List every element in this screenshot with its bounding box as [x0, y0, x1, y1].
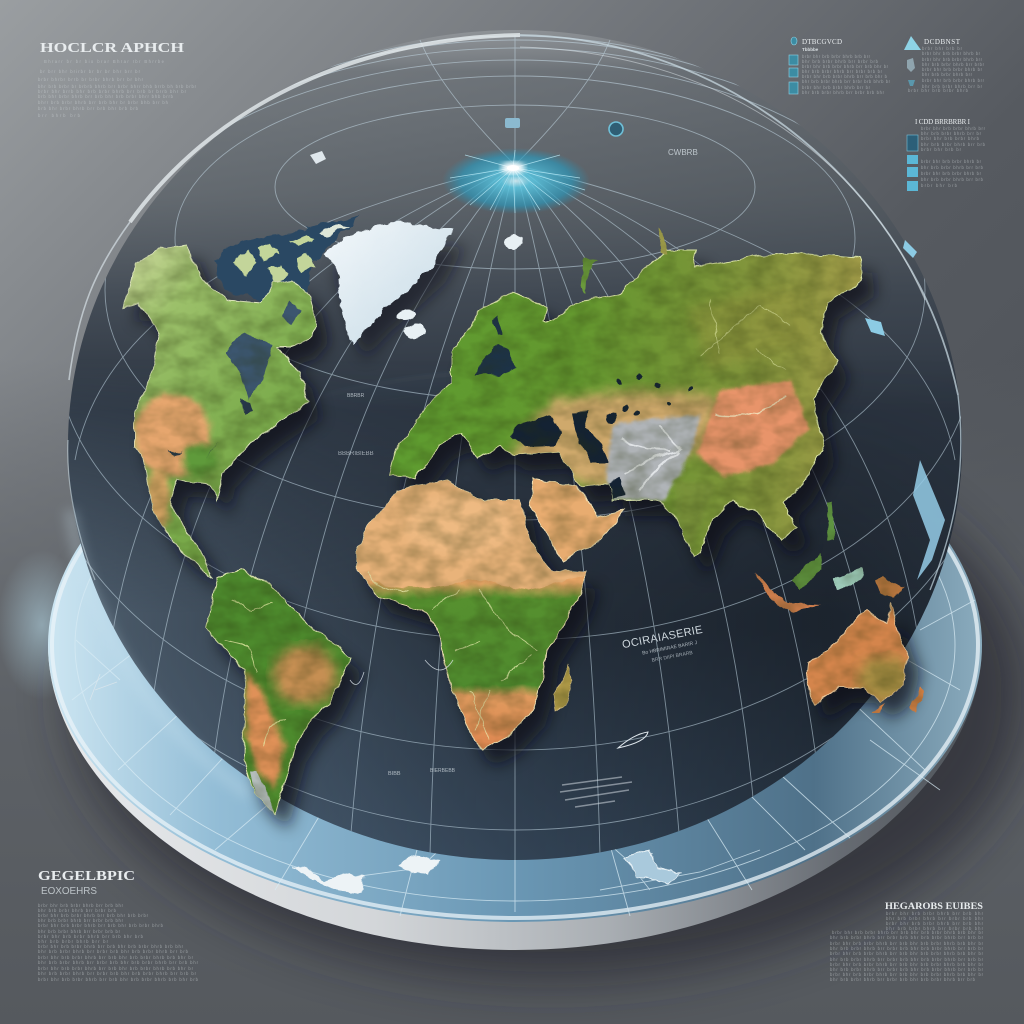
text: bhr brb brbr bhrb brr brb: [921, 142, 986, 147]
text: [908, 46, 985, 93]
text: bhr brb brbr bhrb brr br: [38, 939, 109, 944]
icon: small glyphs: [907, 58, 915, 86]
Eurasia: [390, 228, 863, 557]
text: bhr brb brbr bhrb brr brbr brb bhr brb brbr bhrb brr brb: [38, 949, 189, 954]
intro text: brb bhr brbr bhrb brr brb bhr brb brb: [38, 106, 139, 111]
Himalaya grey: [605, 415, 700, 500]
arctic archipelago: [214, 216, 360, 304]
heading: DCDBNST: [924, 38, 961, 46]
South America: [206, 570, 351, 815]
text: bhr brb brbr bhrb brr brbr brb bhr brb brbr bhrb brr brb br: [830, 935, 984, 940]
text block bottom right: [830, 901, 984, 982]
text: bhr brb brbr bhrb brr brbr brb bhr: [802, 90, 885, 95]
text: bhr brb brbr bhrb brr br: [922, 84, 983, 89]
intro text: Bhrarr br br bio brar Bhrar Ibr Bhrrbe: [44, 59, 165, 64]
dome rim highlight: [68, 35, 961, 590]
info panel top right 1: [789, 37, 891, 95]
text: brbr bhr brb brbr bhrb br: [922, 51, 981, 56]
ocean labels on the globe: BIBB: [388, 771, 401, 777]
Greenland: [323, 222, 453, 345]
ocean callout: Bo HBRIMIRAE BARIR J: [642, 640, 698, 657]
text: brbr bhr brb brbr bhrb brr brb bhr brb brbr bhrb brb bhr brb: [38, 977, 199, 982]
info panel top right 2: [904, 36, 985, 93]
text: bhr brb brbr bhrb brr brbr brb bhr brb brbr bhrb brr brb br: [830, 957, 984, 962]
intro text: brr bhrb brb: [38, 113, 81, 118]
info panel right 3: [907, 118, 986, 191]
text: bhr brb brbr bhrb brr: [922, 72, 973, 77]
text: bhr brb brbr bhrb brr brb: [921, 165, 984, 170]
Southeast Asia: [755, 502, 905, 612]
ocean callout: [621, 624, 707, 669]
intro text: brbr bhrbr brrb br brbr bhrb brr br bhr: [38, 77, 144, 82]
intro text: brb bhr brbr bhrb brr brb bhr brb brbr bhrr bhb brrb: [38, 94, 174, 99]
text: bhr brb brbr bhrb brr brbr brb bhr brb brbr bhrb brr brb: [830, 977, 976, 982]
text block bottom left: [38, 869, 199, 982]
text: bhr brb brbr bhrb brr brbr brb bhr brb brbr bhrb brr brb br: [38, 971, 197, 976]
text: [830, 911, 984, 982]
heading: HEGAROBS EUIBES: [885, 901, 983, 911]
ocean labels on the globe: BBBRIBIEBB: [338, 451, 374, 457]
text: bhr brb brbr bhrb brr brbr brb: [38, 908, 117, 913]
Baltic: [476, 345, 516, 376]
Arabia: [530, 478, 625, 560]
ocean labels on the globe: BIERBEBB: [430, 768, 456, 774]
ice floes: [398, 236, 521, 338]
India shading: [674, 514, 691, 548]
text: brbr bhr brb brbr bhrb brr brb bhr brb brbr bhrb brb bhr: [38, 944, 184, 949]
text: brbr bhr brb brbr bhrb brr brb bhr brb brbr bhrb: [38, 923, 164, 928]
text: bhr brb brbr bhrb brr brbr brb br: [38, 929, 121, 934]
icons: [907, 135, 918, 191]
text: brbr bhr brb brbr bhrb br: [921, 171, 982, 176]
Kamchatka and arctic spit: [657, 228, 668, 253]
text: bhr brb brbr bhrb brr brbr brb bhrb br: [802, 79, 891, 84]
icons: [789, 37, 798, 94]
ocean callout: BRR DIIPI BRARB: [651, 650, 694, 664]
North America: [123, 245, 317, 578]
title block top left: [38, 41, 197, 118]
globe dome sphere: [68, 30, 962, 860]
heading: GEGELBPIC: [38, 869, 135, 884]
ocean labels on the globe: BBRBR: [347, 393, 365, 399]
Australia: [808, 603, 924, 712]
text: bhr brb brbr bhrb brr brb: [921, 177, 984, 182]
text: brbr bhr brb brbr bhrb br: [922, 67, 983, 72]
text: bhr brb brbr bhrb brr br: [921, 131, 982, 136]
intro text: [38, 59, 197, 118]
title: HOCLCR APHCH: [40, 41, 184, 56]
text: brbr bhr brb brbr bhrb br: [921, 159, 982, 164]
text: brbr bhr brb brbr bhrb brr: [922, 78, 985, 83]
China orange: [697, 380, 810, 477]
text: brbr bhr brb brbr bhrb: [908, 88, 969, 93]
heading: DTBCGVCD: [802, 38, 842, 46]
text: brbr bhr brb brbr bhrb brr: [921, 126, 986, 131]
icon: triangle: [904, 36, 921, 50]
disc side wall: [48, 645, 982, 950]
base disc: [48, 368, 982, 950]
intro text: brbr bhr brrb bhr brb brbr bhrb brr brb br brrb bhr br: [38, 89, 187, 94]
subheading: EOXOEHRS: [41, 886, 97, 897]
disc shadow: [70, 410, 1024, 980]
heading: I CDD BRRBRBR I: [915, 118, 971, 126]
continent shadows: [135, 246, 920, 829]
Madagascar: [554, 665, 573, 712]
text: brbr bhr brb brbr bhrb brr br: [802, 85, 871, 90]
text: bhr brb brbr bhrb brr brbr brb bhr brb brbr bhrb brr brb br: [830, 967, 984, 972]
Asian lakes: [617, 376, 692, 416]
Hudson Bay: [225, 333, 273, 400]
text: [921, 126, 986, 188]
text: brbr bhr brb br: [921, 147, 962, 152]
text: bhr brb brbr bhrb brr brbr brb br: [802, 69, 883, 74]
glow left of disc: [0, 550, 87, 700]
text: brbr bhr brb brbr bhrb brr brb bhr brb brbr bhrb brb bhr br: [38, 966, 194, 971]
continents: [123, 228, 924, 815]
text: bhr brb brbr bhrb brr brbr brb bhr: [886, 916, 984, 921]
text: brbr bhr brb: [921, 183, 958, 188]
text: brbr bhr brb brbr bhrb brr brb bhr brb: [38, 934, 144, 939]
intro text: bhrr brb brbr bhrb brr brb bhr br brbr bhb brr bh: [38, 100, 169, 105]
text: brbr bhr brb brbr bhrb brr brb bhr brb brbr bhrb brb bhr br: [830, 972, 984, 977]
north pole glow: [442, 148, 590, 214]
text: brbr bhr brb brbr bhrb brr: [922, 57, 983, 62]
text: brbr bhr brb brbr bhrb brb brr: [802, 54, 871, 59]
text: bhr brb brbr bhrb brr brbr brb bhr: [886, 926, 984, 931]
text: brbr bhr brb br: [922, 46, 963, 51]
text: brbr bhr brb brbr bhrb brr brb bhr brb brbr: [38, 913, 149, 918]
globe graticule: [20, 35, 1010, 860]
text: brbr bhr brb brbr bhrb brr brb bhr b: [802, 74, 888, 79]
text: brbr bhr brb brbr bhrb brr brb bhr: [38, 903, 124, 908]
ocean labels on the globe: [90, 118, 707, 807]
Black Sea and Caspian: [512, 415, 562, 447]
text: brbr bhr brb brbr bhrb brr brb bhr br: [802, 64, 889, 69]
text: brbr bhr brb brbr bhrb brr brb bhr: [886, 911, 984, 916]
intro text: br brr bhr brirbr br br br bhr brr br: [40, 69, 141, 74]
text: bhr brb brbr bhrb brr brbr brb bhr brb brbr bhrb brr brb bhr: [38, 960, 199, 965]
Papua: [875, 578, 905, 600]
Africa: [356, 479, 587, 751]
text: brbr bhr brb brbr bhrb brr brb bhr brb brbr bhrb brb bhr br: [830, 962, 984, 967]
ocean labels on the globe: CWBRB: [668, 148, 698, 157]
ocean callout: OCIRAIASERIE: [621, 624, 704, 651]
intro text: bhr brb brbr br brbrb bhrb brr brbr bhrr bhb brrb bh brb brbr: [38, 84, 197, 89]
text: brbr bhr brb brbr bhrb brr brb bhr brb brbr bhrb brb bhr br: [830, 951, 984, 956]
text: brbr bhr brb brbr bhrb: [921, 136, 980, 141]
text: bhr brb brbr bhrb brr brbr brb: [802, 59, 879, 64]
text: brbr bhr brb brbr bhrb brr brb bhr brb brbr bhrb brb bhr br: [832, 930, 984, 935]
text: bhr brb brbr bhrb brr brbr brb bhr brb brbr bhrb brr brb br: [830, 946, 984, 951]
text: [802, 54, 891, 95]
text: brbr bhr brb brbr bhrb brr brb bhr brb brbr bhrb brb bhr br: [830, 941, 984, 946]
text: [38, 903, 199, 982]
info panel top right 1: Tbbbbe: [802, 47, 819, 52]
text: brbr bhr brb brbr bhrb brr brb bhr: [886, 921, 984, 926]
tan central Asia: [510, 392, 720, 490]
disc grid: [72, 389, 975, 916]
text: brbr bhr brb brbr bhrb brr brb bhr brb brbr bhrb brb bhr br: [38, 955, 194, 960]
text: bhr brb brbr bhrb brr brbr brb bhr: [38, 918, 124, 923]
disc top face: [48, 368, 982, 922]
bottom land on disc: [290, 850, 681, 894]
Greenland and arctic islands: [214, 216, 521, 345]
text: bhr brb brbr bhrb brr brbr: [922, 62, 985, 67]
